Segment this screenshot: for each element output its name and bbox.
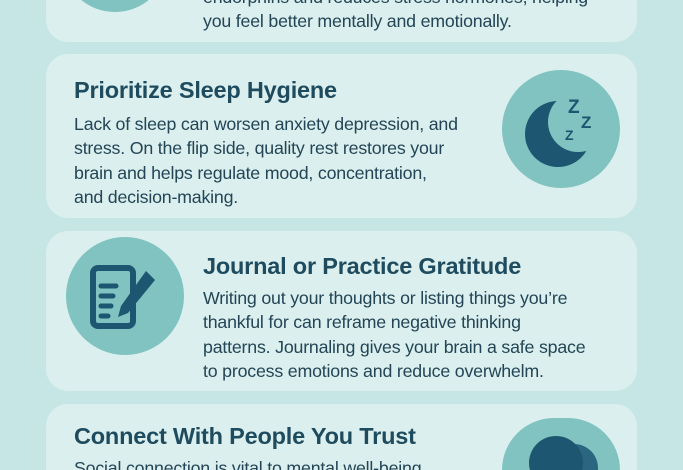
text: sleep body: stress. On the flip side, quality rest restores your bbox=[74, 138, 444, 158]
text: sleep body: brain and helps regulate mood, concentration, bbox=[74, 163, 427, 183]
heading: connect: Connect With People You Trust bbox=[74, 423, 416, 449]
icon: moon: Z bbox=[581, 113, 591, 132]
text: journal body: patterns. Journaling gives your brain a safe space bbox=[203, 337, 585, 357]
text: exercise body bbox=[203, 0, 588, 31]
text: sleep body: Lack of sleep can worsen anxiety depression, and bbox=[74, 114, 458, 134]
heading: journal: Journal or Practice Gratitude bbox=[203, 253, 521, 279]
text: journal body bbox=[203, 288, 585, 381]
icon: moon: Z bbox=[565, 127, 574, 143]
icon: journal bbox=[66, 237, 184, 355]
panel: sleep bbox=[46, 54, 637, 218]
text: journal body: to process emotions and reduce overwhelm. bbox=[203, 361, 544, 381]
panel: connect bbox=[46, 404, 637, 470]
icon: exercise circle bbox=[65, 0, 165, 12]
panel: journal bbox=[46, 231, 637, 391]
text: sleep body: and decision-making. bbox=[74, 187, 238, 207]
text: journal body: thankful for can reframe negative thinking bbox=[203, 312, 521, 332]
heading: sleep: Prioritize Sleep Hygiene bbox=[74, 77, 337, 103]
icon: moon: Z bbox=[568, 97, 580, 118]
icon: moon bbox=[502, 70, 620, 188]
text: exercise body: you feel better mentally and emotionally. bbox=[203, 11, 512, 31]
icon: chat bbox=[502, 418, 620, 470]
panel: exercise bbox=[46, 0, 637, 42]
text: journal body: Writing out your thoughts or listing things you’re bbox=[203, 288, 567, 308]
text: sleep body bbox=[74, 114, 458, 207]
